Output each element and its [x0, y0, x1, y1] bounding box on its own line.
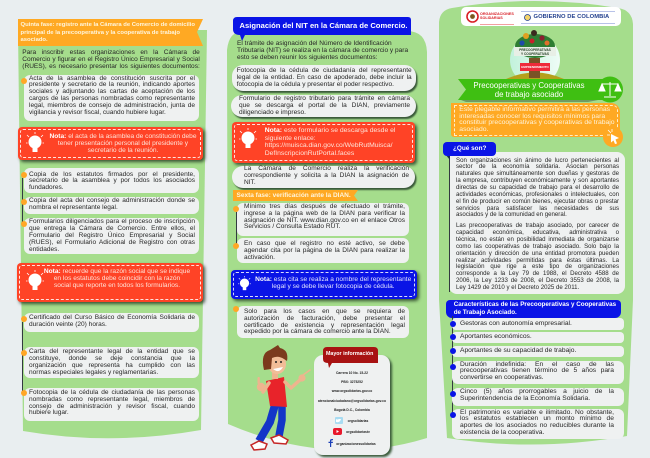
list item: fotocopia: consejo de administración y revisor fiscal, cuando [29, 403, 195, 410]
callout: intro orange: asociado. [459, 126, 488, 133]
text: intro: esto se deben reunir los siguientes documentos: [237, 54, 377, 61]
text: contact details: orgsolidariastv [346, 430, 370, 434]
illustration: solidarity tree [506, 30, 564, 79]
callout: note formulario: DefInscripcionRutPortal.faces [265, 150, 354, 156]
callout: note formulario [232, 122, 415, 163]
column: NIT assignment: diligenciado e impreso. [239, 109, 306, 116]
column: NIT assignment: Fotocopia de la cédula de ciudadanía del representante [237, 67, 412, 74]
icon: Organizaciones Solidarias seal [466, 10, 479, 23]
text: intro: Comercio y figurar en el Registro Único Empresarial y Social [22, 56, 200, 63]
panel: definition text: realizar actividades permitidas para éstas últimas. La [456, 257, 619, 264]
contact card: Mayor información [314, 347, 394, 458]
panel: definition text: 2006, la Ley 1233 de 2008, el Decreto 3553 de 2008, la [456, 277, 619, 284]
callout: note formulario: https://muisca.dian.gov.co/WebRutMuisca/ [265, 142, 393, 149]
title ribbon: Precooperativas y Cooperativas [473, 80, 585, 90]
callout: note formulario: siguiente enlace: [265, 134, 316, 142]
list item: carta [21, 347, 199, 378]
list item: certificado [21, 313, 199, 332]
list item: estatutos: secretario de la asamblea y por todos los asociados [29, 177, 195, 184]
column: NIT assignment: fotocopia de la cédula y presentar el poder respectivo. [237, 81, 394, 88]
list item: mínimo tres días: Mínimo tres días después de efectuado el trámite, [244, 203, 405, 210]
list item: mínimo tres días: ingrese a la página web de la DIAN para verificar la [244, 210, 405, 217]
icon: facebook [328, 439, 333, 447]
column: NIT assignment: que se descarga el portal de la DIAN, previamente [239, 102, 410, 109]
panel: definition text: naturales que simultáneamente son dueñas y gestoras de [456, 170, 619, 177]
list item: patrimonio [450, 409, 624, 439]
list item: cinco años [450, 388, 624, 406]
icon: light bulb [238, 276, 251, 290]
panel: definition text [449, 152, 625, 294]
list item: certificado: duración veinte (20) horas. [29, 321, 107, 328]
list item: fotocopia cédula [232, 65, 416, 91]
callout: note 2: Nota: recuerde que la razón social que se indique [44, 268, 190, 274]
panel: definition text: directas de su capacidad de trabajo para el desarrollo de [456, 184, 619, 191]
list item: formularios: que entrega la Cámara de Comercio. Entre ellos, el [29, 225, 195, 232]
list item: formularios: Formularios diligenciados para el proceso de inscripción [29, 218, 195, 225]
list item: autorización de facturación: expedido por la cámara de comercio ante la DIAN. [244, 328, 391, 335]
list item: agendar cita: agendar cita por la página de la DIAN para realizar la [244, 247, 405, 254]
text: contact details [318, 370, 386, 446]
column: NIT assignment: correspondiente y solicita a la DIAN la asignación de [244, 172, 409, 179]
list item: patrimonio: aportes de los asociados no reducibles durante la [460, 422, 614, 429]
list item: agendar cita: En caso que el registro no esté activo, se debe [244, 240, 405, 247]
heading: ¿Qué son?: ¿Qué son? [453, 145, 486, 152]
text: intro: Tributaria (NIT) se realiza en la cámara de comercio y para [237, 47, 408, 54]
list item: gestoras: Gestoras con autonomía empresarial. [460, 320, 572, 327]
list item: aportantes económicos: Aportantes económicos. [460, 333, 532, 340]
title ribbon [458, 76, 623, 102]
list item: acta: presidente y secretario de la reunión, indicando aportes [29, 81, 195, 88]
callout: intro orange: Este plegable informativo permitirá a las personas [459, 106, 610, 113]
list item: acta: legal, miembros de consejo de administración, junta de [29, 102, 195, 109]
list item: capacidad de trabajo: Aportantes de su capacidad de trabajo. [460, 347, 576, 354]
list item: mínimo tres días [233, 203, 409, 236]
text: contact details: PBX: 3275252 [341, 380, 363, 384]
panel: definition text: Las precooperativas de trabajo asociado, por carecer de [456, 222, 619, 229]
list item: formularios: entidades. [29, 246, 59, 253]
list item: formularios [21, 218, 199, 254]
callout: note 1: Nota: el acta de la asamblea de constitución debe [50, 133, 196, 140]
list item: estatutos: Copia de los estatutos firmados por el presidente, [29, 171, 195, 178]
heading: Sexta fase ribbon [233, 190, 358, 201]
list item: patrimonio: los estatutos establecen un monto mínimo de [460, 415, 614, 422]
list item: cinco años: Cinco (5) años prorrogables a juicio de la [460, 388, 614, 395]
column: cover and definitions [439, 1, 633, 444]
list item: fotocopia: hubiere lugar. [29, 409, 69, 416]
icon: light bulb [26, 270, 44, 290]
list item: acta: cargos de las personas nombradas como representante [29, 95, 195, 102]
column: fifth phase [16, 19, 208, 438]
logo text: Organizaciones Solidarias: ORGANIZACIONES [480, 12, 514, 16]
list item: estatutos: fundadores. [29, 184, 64, 191]
panel: definition text: el fin de producir en común bienes, ejecutar obras o prestar [456, 198, 619, 205]
list item: duración: Duración indefinida: En el caso de las [460, 361, 614, 368]
callout: blue note: Nota: esta cita se realiza a nombre del representante [255, 276, 411, 283]
list item: acta del consejo: nombra el representante legal. [29, 204, 118, 211]
list item: cinco años: Superintendencia de la Economía Solidaria. [460, 395, 590, 402]
text: contact details: orgsolidarias [348, 419, 368, 423]
icon: twitter [335, 417, 343, 424]
panel: definition text: actividades económicas, profesionales o intelectuales, con [456, 191, 619, 198]
heading: Mayor información [323, 347, 378, 368]
panel: definition text: la empresa, contribuyen económicamente y son aportantes [456, 177, 619, 184]
heading: Asignación del NIT: Asignación del NIT en la Cámara de Comercio. [240, 20, 407, 30]
callout: note 1 [18, 127, 203, 160]
panel: definition text: sector de la economía solidaria. Asocian personas [456, 163, 619, 170]
list item: autorización de facturación: Solo para los casos en que se requiera de [244, 308, 405, 315]
heading: Sexta fase ribbon: Sexta fase: verificación ante la DIAN. [236, 192, 351, 199]
callout: intro orange [451, 103, 623, 147]
callout: blue note: legal y se debe llevar fotocopia de cédula. [272, 283, 395, 290]
heading: Quinta fase ribbon: principal de la precooperativa y la cooperativa de trabajo [20, 30, 180, 36]
text: contact details: Bogotá D.C., Colombia [334, 408, 370, 412]
panel: definition text: capacidad económica, educativa, administrativa o [456, 229, 619, 236]
list item: autorización de facturación: autorización de facturación, debe presentar el [244, 315, 405, 322]
callout: note formulario: Nota: este formulario se descarga desde el [265, 127, 395, 134]
logo bar [461, 7, 621, 26]
icon: cursor click [603, 129, 623, 147]
list item: verificación [232, 166, 415, 188]
icon: light bulb [239, 128, 257, 148]
list item: carta: organización que representa ha cumplido con las [29, 362, 195, 369]
title ribbon: de trabajo asociado [495, 90, 563, 99]
list item: capacidad de trabajo [450, 346, 624, 357]
column: NIT assignment: NIT. [244, 179, 256, 186]
list item: estatutos [21, 168, 199, 193]
list item: carta: Carta del representante legal de la entidad que se [29, 348, 195, 355]
list item: duración [450, 361, 624, 384]
list item: formularios: (RUES), el Formulario Adicional de Registro con otras [29, 239, 195, 246]
logo text: Organizaciones Solidarias [480, 12, 514, 24]
list item: certificado: Certificado del Curso Básico de Economía Solidaria de [29, 314, 195, 321]
panel: definition text: Son organizaciones sin ánimo de lucro pertenecientes al [456, 156, 619, 164]
text: contact details: Carrera 10 No. 15-22 [336, 370, 368, 374]
callout: note 1: tener presentación personal del presidente y [58, 140, 188, 147]
callout: note 2: social que reporte en todos los formularios. [54, 282, 180, 289]
logo: Gobierno de Colombia: GOBIERNO DE COLOMBIA [534, 14, 609, 20]
illustration: solidarity tree: PRECOOPERATIVAS [519, 48, 551, 52]
icon: light bulb [26, 132, 44, 152]
list item: fotocopia: Fotocopia de la cédula de ciudadanía de las personas [29, 389, 195, 396]
text: intro: El trámite de asignación del Número de Identificación [237, 40, 392, 47]
callout: note 2: en los estatutos debe coincidir con la razón [54, 275, 180, 282]
heading: Características: Características de las Precooperativas y Cooperativas [454, 301, 616, 308]
panel: definition text: como las cooperativas de trabajo asociado. Solo bajo la [456, 243, 619, 250]
list item: carta: normas especiales legales y reglamentarias. [29, 369, 158, 376]
list item: agendar cita [233, 238, 409, 263]
list item: formulario tributario [231, 95, 416, 117]
list item: patrimonio: existencia de la cooperativa. [460, 429, 544, 436]
illustration: boy pointing [250, 345, 311, 451]
list item: duración: precooperativas tienen término de 5 años para [460, 367, 614, 374]
callout: blue note [231, 270, 417, 299]
heading: Quinta fase ribbon: asociado. [20, 37, 48, 43]
list item: duración: convertirse en cooperativas. [460, 374, 544, 381]
panel: definition text: orientación y dirección de una entidad promotora pueden [456, 250, 619, 257]
column: NIT assignment: La Cámara de Comercio realiza la verificación [244, 165, 409, 172]
heading: ¿Qué son? [443, 142, 496, 160]
column: NIT assignment: Formulario de registro tributario para trámite en cámara [239, 95, 410, 102]
panel: definition text: corresponde a la Ley 79 de 1988, el Decreto 4588 de [456, 270, 619, 277]
list item: autorización de facturación [233, 306, 409, 338]
text: intro: (RUES), es necesario presentar los siguientes documentos: [22, 63, 200, 70]
logo text: Organizaciones Solidarias: SOLIDARIAS [480, 16, 503, 20]
logo: Gobierno de Colombia [521, 11, 615, 24]
text: contact details: www.orgsolidarias.gov.co [332, 389, 372, 393]
list item: acta del consejo: Copia del acta del consejo de administración donde se [29, 197, 195, 204]
list item: carta: constituye, donde se deje constancia que la [29, 355, 195, 362]
list item: fotocopia: nombradas como representante legal, miembros de [29, 396, 195, 403]
panel: definition text: Ley 1429 de 2010 y el Decreto 2025 de 2011. [456, 284, 579, 291]
callout: intro orange: interesadas conocer los requisitos mínimos para [459, 113, 605, 120]
list item: acta [21, 75, 199, 121]
heading: Asignación del NIT [233, 17, 411, 41]
column: NIT assignment [227, 17, 427, 458]
list item: patrimonio: El patrimonio es variable e ilimitado. No obstante, [460, 409, 614, 416]
icon: youtube [333, 428, 342, 435]
panel: definition text: legislación que rige a este tipo de organizaciones [456, 263, 619, 270]
text: contact details: organizacionessolidarias [336, 442, 376, 446]
list item: autorización de facturación: certificado de existencia y representación legal [244, 322, 405, 329]
text: intro: Para inscribir estas organizaciones en la Cámara de [22, 49, 200, 56]
list item: fotocopia [21, 388, 199, 421]
heading: Características [446, 300, 621, 318]
text: intro [237, 40, 408, 61]
list item: acta: Acta de la asamblea de constitución suscrita por el [29, 75, 195, 82]
text: contact details: atencionalciudadano@orgsolidarias.gov.co [318, 398, 386, 402]
panel: definition text: asociados y de la comunidad en general. [456, 211, 567, 218]
list item: mínimo tres días: asignación de NIT. www.dian.gov.co en el enlace Otros [244, 217, 405, 224]
heading: Características: de Trabajo Asociado. [454, 309, 517, 316]
list item: mínimo tres días: Servicios / Consulta Estado RUT. [244, 223, 340, 230]
callout: intro orange: constituir precooperativas y cooperativas de trabajo [459, 119, 615, 126]
heading: Quinta fase ribbon: Quinta fase: registro ante la Cámara de Comercio de domicilio [20, 22, 195, 28]
list item: gestoras [450, 318, 624, 330]
list item: acta: vigilancia y revisor fiscal, cuando hubiere lugar. [29, 109, 166, 116]
heading: Quinta fase ribbon [18, 19, 203, 46]
list item: agendar cita: activación. [244, 254, 275, 261]
list item: acta: sociales y adjuntando las cartas de aceptación de los [29, 88, 195, 95]
illustration: solidarity tree: EMPRENDIMIENTO [521, 65, 549, 69]
list item: acta del consejo [21, 197, 199, 214]
list item: formularios: Formulario del Registro Único Empresarial y Social [29, 232, 195, 239]
text: intro [22, 49, 200, 70]
heading: Mayor información: Mayor información [326, 350, 373, 356]
callout: note 2 [17, 263, 203, 302]
column: NIT assignment: legal de la entidad. En caso de apoderado, debe incluir la [237, 74, 412, 81]
list item: aportantes económicos [450, 332, 624, 343]
illustration: solidarity tree: Y COOPERATIVAS [521, 52, 549, 56]
callout: note 1: secretario de la reunión. [88, 147, 158, 154]
panel: definition text: técnica, no están en posibilidad inmediata de organizarse [456, 236, 619, 243]
panel: definition text: servicios para satisfacer las necesidades de sus [456, 205, 619, 212]
